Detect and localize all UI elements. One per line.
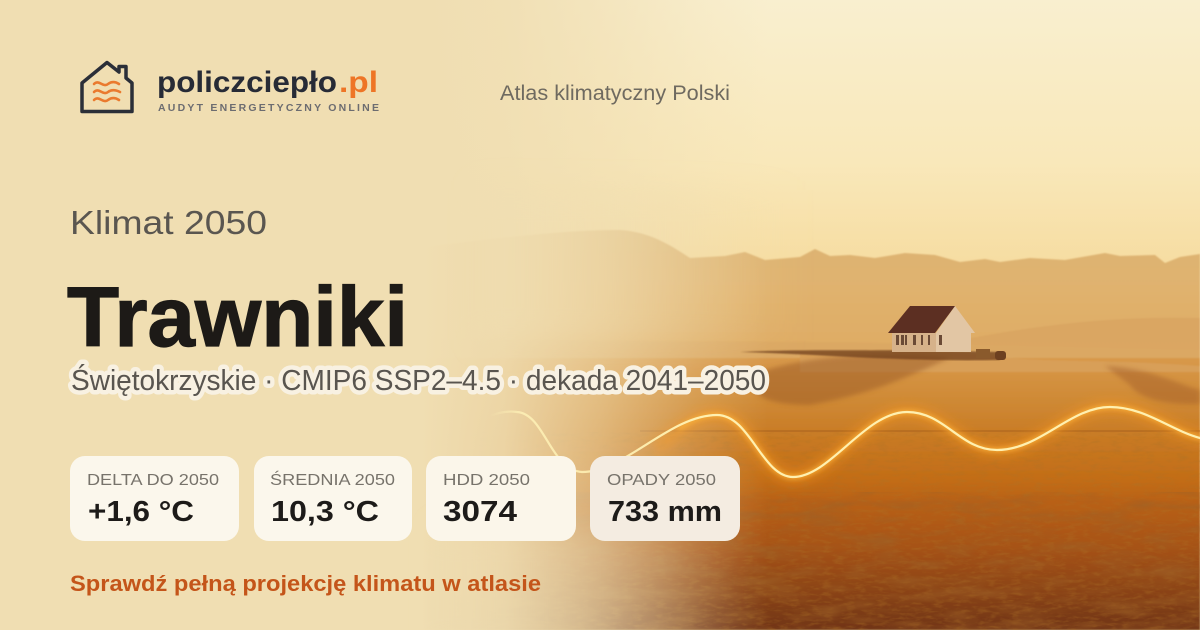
- stat card: HDD: HDD 2050: [443, 472, 530, 489]
- title: Trawniki: [67, 270, 408, 364]
- stat card: HDD: [426, 456, 576, 541]
- logo domain: .pl: [339, 66, 378, 99]
- chart line: glowing wave: [490, 407, 1200, 477]
- stat card: precipitation: 733 mm: [608, 496, 722, 528]
- call to action: Sprawdź pełną projekcję klimatu w atlasie: [70, 571, 541, 596]
- stat card: average: 10,3 °C: [271, 496, 379, 528]
- stat card: precipitation: [590, 456, 740, 541]
- logo tagline: AUDYT ENERGETYCZNY ONLINE: [158, 102, 379, 114]
- stat card: average: [254, 456, 412, 541]
- stat card: delta: +1,6 °C: [88, 496, 194, 528]
- subtitle: Klimat 2050: Klimat 2050: [70, 204, 267, 241]
- stat card: HDD: 3074: [443, 496, 517, 528]
- logo: [82, 62, 379, 114]
- texture: field grain: [400, 432, 1200, 630]
- icon: logo house: [82, 62, 132, 112]
- stat card: delta: [70, 456, 239, 541]
- header label: Atlas klimatyczny Polski: [500, 82, 730, 105]
- stat card: delta: DELTA DO 2050: [87, 472, 219, 489]
- stat card: precipitation: OPADY 2050: [607, 472, 716, 489]
- stat card: average: ŚREDNIA 2050: [270, 470, 395, 489]
- icon: house in the field: [740, 306, 1006, 360]
- texture: dark field patches: [400, 492, 1200, 630]
- location and scenario line: Świętokrzyskie · CMIP6 SSP2–4.5 · dekada 2041–2050: [71, 363, 766, 397]
- logo wordmark: policzciepło: [157, 66, 337, 99]
- shadow on hills: [754, 355, 950, 405]
